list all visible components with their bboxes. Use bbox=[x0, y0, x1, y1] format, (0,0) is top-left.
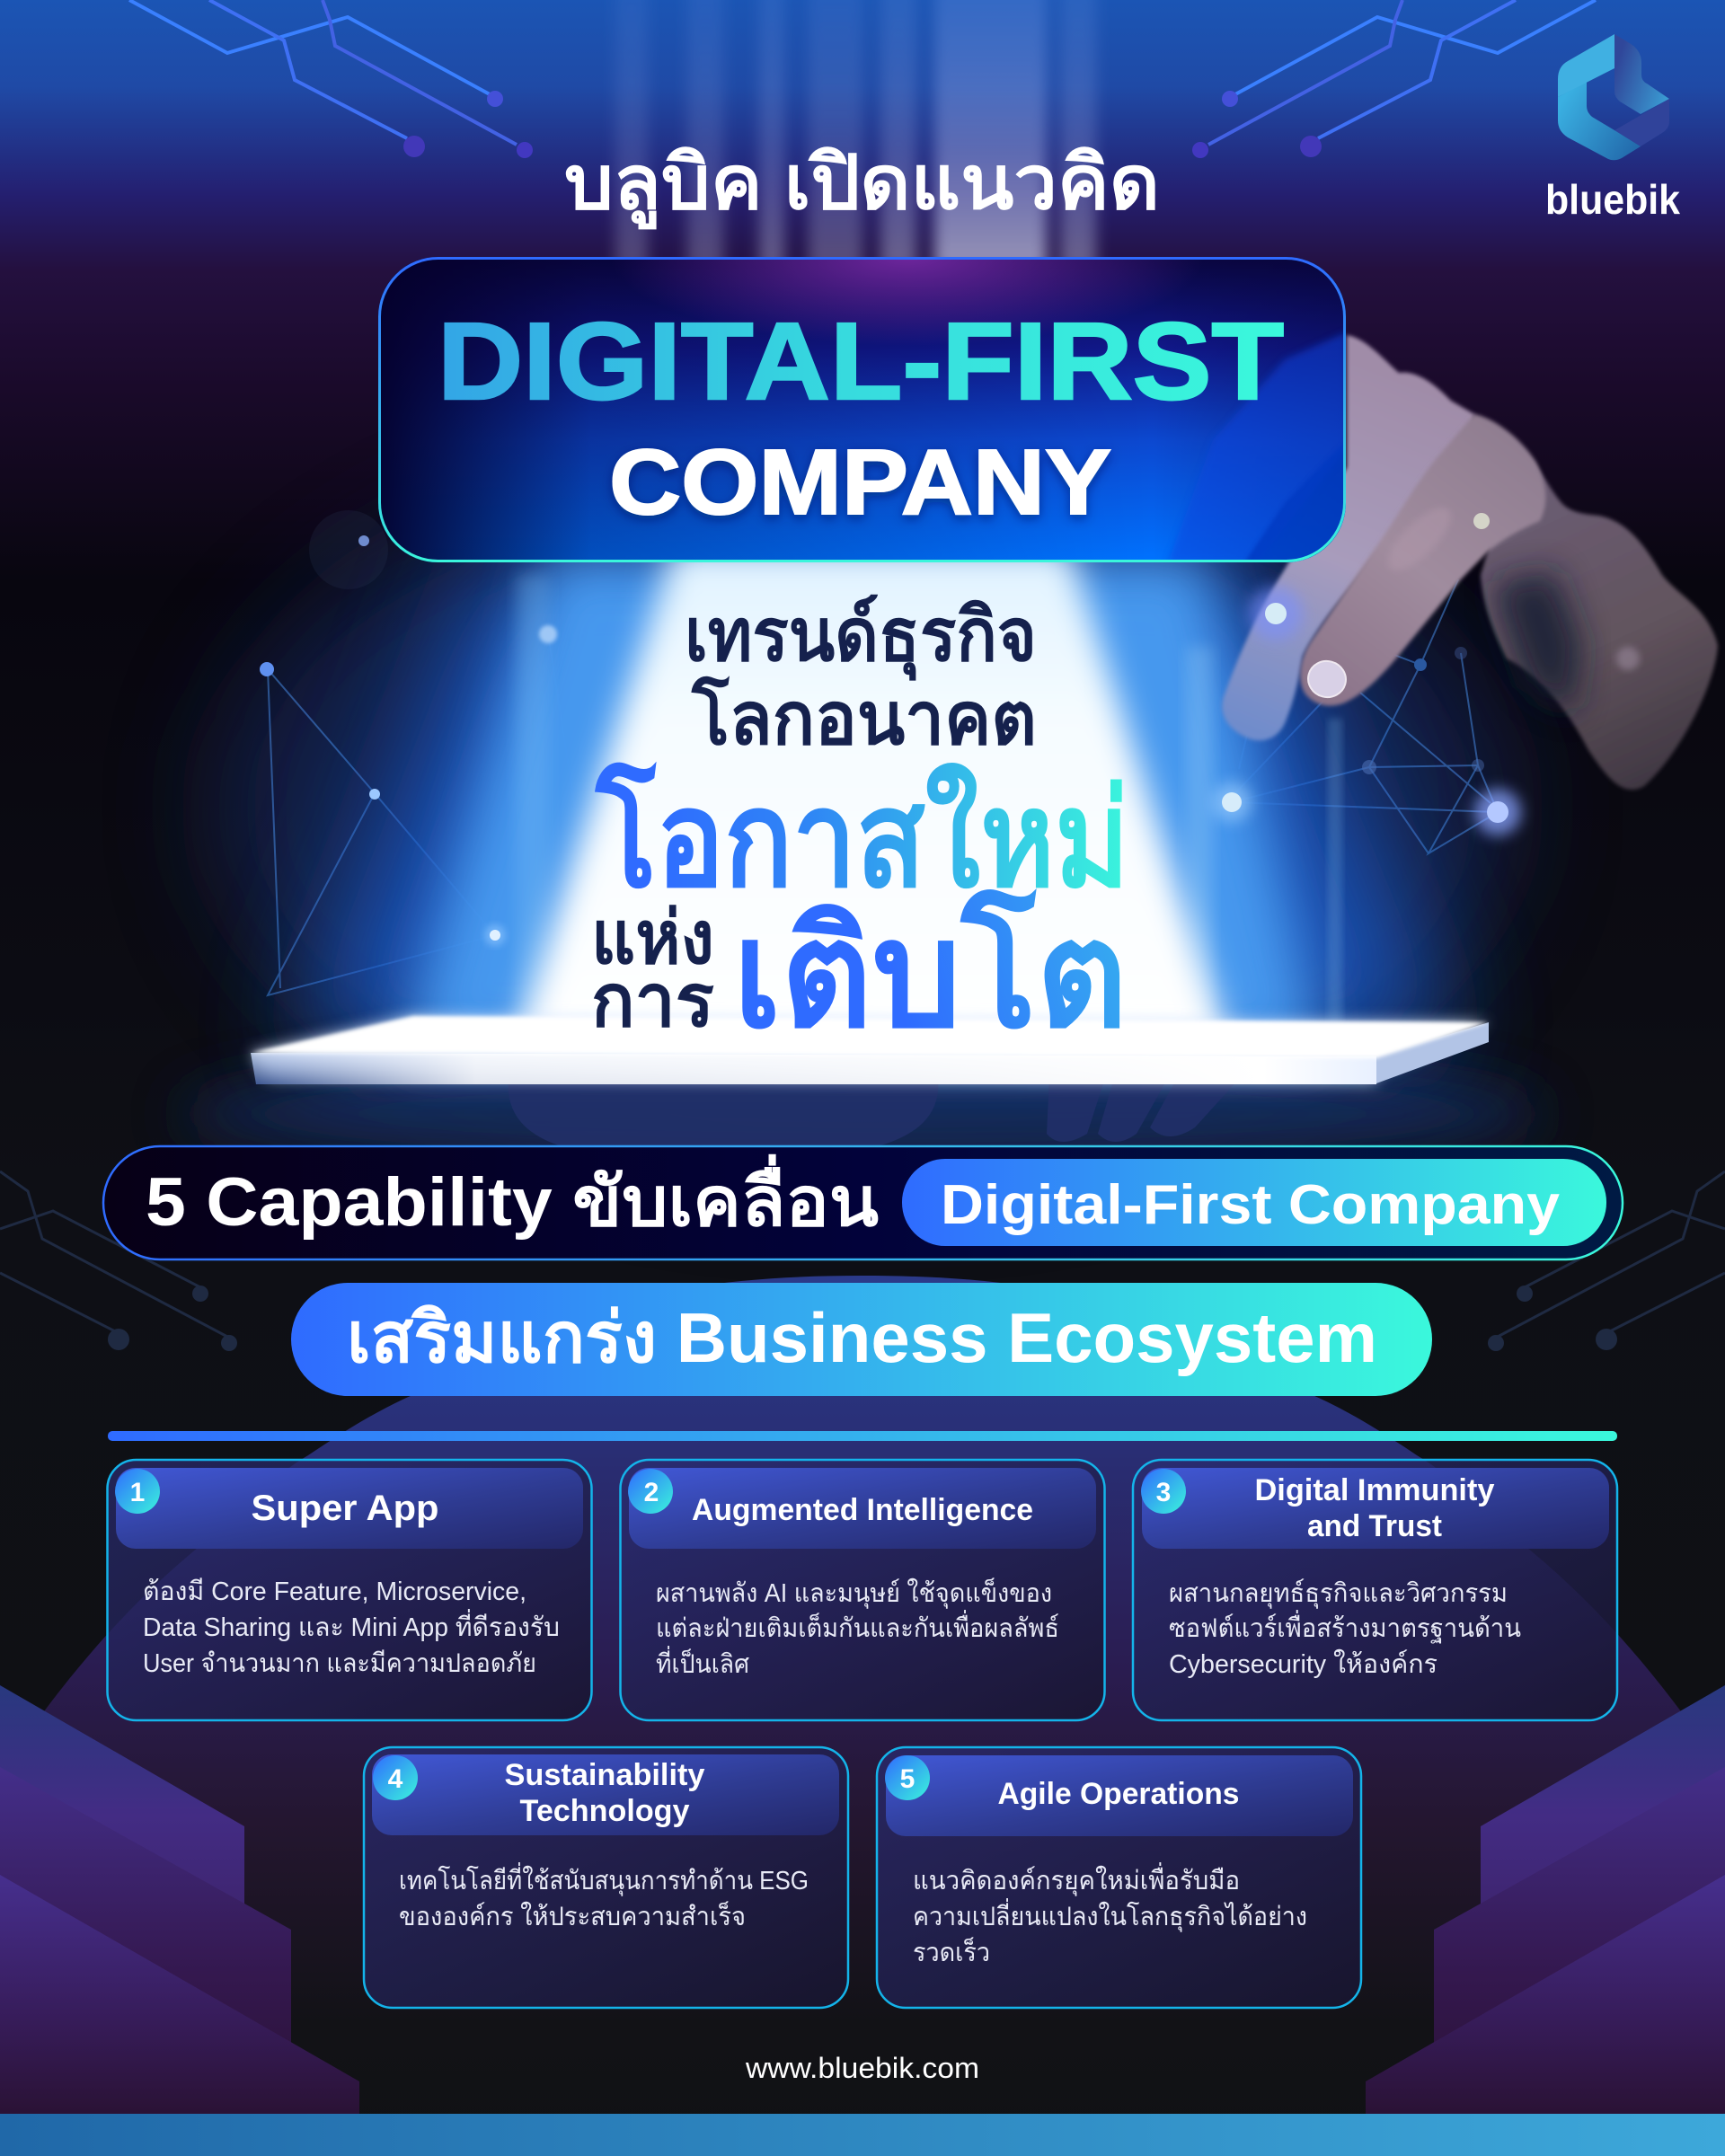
card 4 title: Technology bbox=[519, 1794, 690, 1828]
hand bbox=[1222, 335, 1718, 790]
inner pill: Digital-First Company bbox=[941, 1174, 1561, 1236]
card 3 body bbox=[1169, 1578, 1521, 1679]
card 5 body: รวดเร็ว bbox=[913, 1936, 990, 1967]
badge 2: 2 bbox=[644, 1478, 659, 1507]
card 3 title: and Trust bbox=[1307, 1509, 1442, 1543]
headline: trends: เทรนด์ธุรกิจ bbox=[685, 594, 1037, 681]
vertical streaks bbox=[517, 575, 549, 1042]
card 3 title bbox=[1254, 1473, 1495, 1543]
heading: digital-first: DIGITAL-FIRST bbox=[438, 300, 1284, 422]
card 1 body: ต้องมี Core Feature, Microservice, bbox=[143, 1577, 526, 1606]
wrist crease shadow bbox=[1491, 570, 1583, 714]
knuckles and middle finger bbox=[1222, 335, 1474, 740]
card 2: augmented intelligence bbox=[620, 1460, 1105, 1720]
side stepped shapes left bbox=[0, 1685, 359, 2114]
headline: of growth: เติบโต bbox=[733, 888, 1128, 1058]
badge 5: 5 bbox=[900, 1764, 915, 1794]
light beams above title box bbox=[615, 0, 1096, 270]
badge 2 bbox=[628, 1469, 673, 1514]
tablet side bbox=[1376, 1022, 1489, 1083]
gradient divider bbox=[108, 1431, 1617, 1441]
logo mark bbox=[1558, 34, 1669, 160]
headline: new opportunities: โอกาสใหม่ bbox=[594, 761, 1129, 915]
heading: company: COMPANY bbox=[609, 430, 1111, 534]
card 3 body: ผสานกลยุทธ์ธุรกิจและวิศวกรรม bbox=[1169, 1578, 1508, 1609]
card 4 body: เทคโนโลยีที่ใช้สนับสนุนการทำด้าน ESG bbox=[399, 1862, 809, 1896]
index knuckle highlight bbox=[1379, 499, 1460, 579]
badge 4 bbox=[373, 1755, 418, 1800]
badge 3: 3 bbox=[1156, 1478, 1171, 1507]
card 5 title: Agile Operations bbox=[997, 1777, 1240, 1811]
badge 5 bbox=[885, 1755, 930, 1800]
network lines bbox=[268, 579, 1498, 995]
logo wordmark: bluebik bbox=[1545, 176, 1680, 223]
index finger bbox=[1300, 414, 1545, 706]
network nodes bbox=[260, 510, 1640, 946]
inner pill bbox=[902, 1159, 1606, 1246]
circuit lines: top right bbox=[1192, 0, 1596, 158]
logo bbox=[1545, 34, 1680, 223]
card 4 body: ขององค์กร ให้ประสบความสำเร็จ bbox=[399, 1900, 746, 1931]
headline: of growth bbox=[591, 888, 1128, 1058]
ecosystem banner bbox=[291, 1283, 1432, 1396]
card 3 body: Cybersecurity ให้องค์กร bbox=[1169, 1648, 1438, 1679]
card 2 body: แต่ละฝ่ายเติมเต็มกันและกันเพื่อผลลัพธ์ bbox=[656, 1610, 1059, 1643]
outer blue glow bbox=[296, 562, 1455, 1051]
hand beneath tablet bbox=[509, 1078, 1240, 1150]
tablet bbox=[251, 1016, 1489, 1084]
bottom colour bar bbox=[0, 2114, 1725, 2156]
card 4: sustainability technology bbox=[364, 1747, 848, 2008]
nail bbox=[1305, 657, 1349, 702]
circuit lines: top left bbox=[129, 0, 533, 158]
card 2 body: ผสานพลัง AI และมนุษย์ ใช้จุดแข็งของ bbox=[656, 1577, 1052, 1609]
badge 3 bbox=[1141, 1469, 1186, 1514]
mid glow bbox=[404, 557, 1321, 1051]
headline: trends: โลกอนาคต bbox=[691, 676, 1037, 760]
card 2 body bbox=[656, 1577, 1059, 1679]
card 5 body: แนวคิดองค์กรยุคใหม่เพื่อรับมือ bbox=[913, 1862, 1240, 1896]
card 4 title: Sustainability bbox=[505, 1758, 705, 1792]
card 4 body bbox=[399, 1862, 809, 1931]
card 5 body: ความเปลี่ยนแปลงในโลกธุรกิจได้อย่าง bbox=[913, 1898, 1307, 1932]
ghost hand in box bbox=[1168, 332, 1346, 562]
card 5 body bbox=[913, 1862, 1307, 1967]
badge 4: 4 bbox=[388, 1764, 403, 1794]
headline: of growth: แห่ง bbox=[591, 897, 714, 979]
headline: trends bbox=[685, 594, 1037, 760]
card 1 body bbox=[143, 1577, 560, 1678]
card 2 title: Augmented Intelligence bbox=[692, 1493, 1033, 1527]
card 1 body: Data Sharing และ Mini App ที่ดีรองรับ bbox=[143, 1609, 560, 1642]
card 2 body: ที่เป็นเลิศ bbox=[656, 1646, 750, 1679]
website: www.bluebik.com bbox=[745, 2052, 979, 2084]
card 1 title: Super App bbox=[252, 1489, 438, 1528]
card 3 title: Digital Immunity bbox=[1254, 1473, 1495, 1507]
side stepped shapes right bbox=[1366, 1685, 1725, 2114]
capability text: 5 Capability ขับเคลื่อน bbox=[146, 1153, 879, 1241]
navy ambient glow bbox=[180, 449, 1545, 1177]
card 4 title bbox=[505, 1758, 705, 1828]
tablet front edge bbox=[251, 1053, 1376, 1084]
dome backdrop bbox=[0, 1276, 1725, 2156]
side circuit lines bbox=[0, 1171, 1725, 1351]
tablet top surface bbox=[251, 1016, 1489, 1058]
ecosystem banner: เสริมแกร่ง Business Ecosystem bbox=[347, 1298, 1377, 1377]
badge 1 bbox=[115, 1469, 160, 1514]
card 3 body: ซอฟต์แวร์เพื่อสร้างมาตรฐานด้าน bbox=[1169, 1610, 1521, 1644]
panel: digital-first company bbox=[378, 257, 1346, 562]
hand back and wrist bbox=[1481, 449, 1718, 790]
headline: of growth: การ bbox=[591, 960, 714, 1042]
central light beam bbox=[296, 548, 1455, 1051]
badge 1: 1 bbox=[130, 1478, 145, 1507]
card 1: super app bbox=[108, 1460, 591, 1720]
title: Bluebik opens the idea: บลูบิค เปิดแนวคิด bbox=[564, 140, 1160, 230]
capability banner bbox=[103, 1146, 1623, 1259]
card 5: agile operations bbox=[877, 1747, 1361, 2008]
card 3: digital immunity and trust bbox=[1133, 1460, 1617, 1720]
card 1 body: User จำนวนมาก และมีความปลอดภัย bbox=[143, 1649, 536, 1678]
white core bbox=[512, 548, 1231, 1051]
tablet glow bbox=[251, 1016, 1489, 1082]
